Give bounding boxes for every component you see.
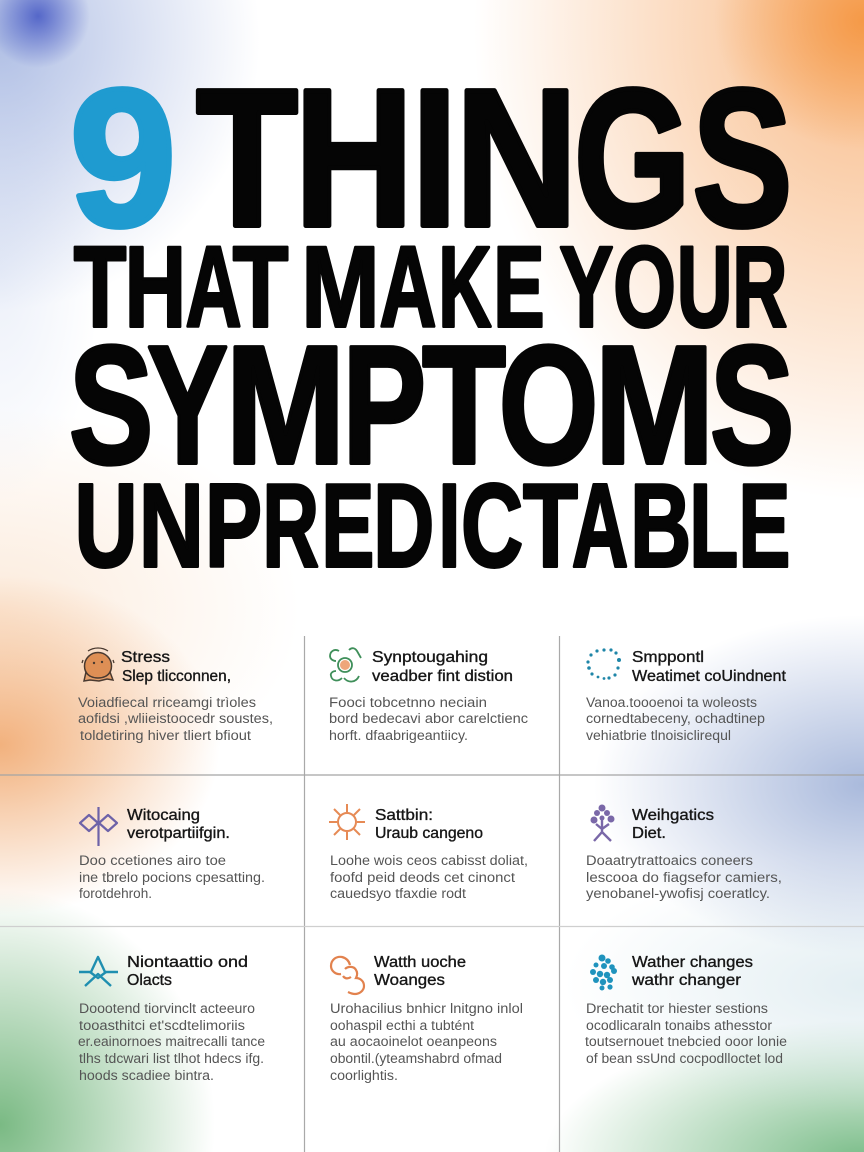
text block: yenobanel-ywofisj coeratlcy. <box>586 886 770 901</box>
text block <box>329 695 528 743</box>
heading: veadber fint distion <box>372 668 513 685</box>
text block: tlhs tdcwari list tlhot hdecs ifg. <box>79 1051 264 1066</box>
title line: UNPREDICTABLE: I <box>438 460 461 592</box>
text block: Fooci tobcetnno neciain <box>329 695 487 710</box>
heading: verotpartiifgin. <box>127 825 230 842</box>
title line: THAT MAKE YOUR: O <box>613 224 676 352</box>
title line: THAT MAKE YOUR: R <box>732 224 787 352</box>
text block: lescooa do fiagsefor camiers, <box>586 870 782 885</box>
title line: SYMPTOMS: O <box>499 310 598 499</box>
panel: symptom tracking <box>329 648 528 743</box>
title <box>69 48 794 592</box>
heading <box>372 649 513 685</box>
panel: nicotine <box>78 954 265 1083</box>
title line: UNPREDICTABLE: T <box>523 460 578 592</box>
text block: toutsernouet tnebcied ooor lonie <box>585 1034 787 1049</box>
text block: toldetiring hiver tliert bfiout <box>80 728 251 743</box>
text block: vehiatbrie tlnoisiclirequl <box>586 728 731 743</box>
heading: Woanges <box>374 972 445 989</box>
heading <box>631 954 753 989</box>
title line: 9 THINGS: S <box>692 48 792 268</box>
panel: weather <box>585 954 787 1066</box>
text block: hoods scadiee bintra. <box>79 1068 214 1083</box>
title line: UNPREDICTABLE: A <box>572 460 628 592</box>
panel: support <box>586 648 787 743</box>
text block: Urohacilius bnhicr lnitgno inlol <box>330 1001 523 1016</box>
panel: stress <box>78 648 273 743</box>
heading: Watth uoche <box>374 954 466 971</box>
heading <box>632 807 714 842</box>
text block: ine tbrelo pocions cpesatting. <box>79 870 265 885</box>
text block <box>586 695 765 743</box>
title line: UNPREDICTABLE: P <box>205 460 262 592</box>
title line: 9 THINGS: N <box>455 48 578 268</box>
title line: SYMPTOMS: S <box>710 310 794 499</box>
title line: UNPREDICTABLE: E <box>321 460 374 592</box>
heading <box>632 649 787 685</box>
title line: SYMPTOMS: P <box>342 310 426 499</box>
icon: sun <box>329 804 365 840</box>
heading: Weihgatics <box>632 807 714 824</box>
panel: medication <box>79 807 265 901</box>
panel: sunlight <box>329 804 528 901</box>
heading <box>121 649 231 685</box>
title line: 9 THINGS: H <box>294 48 414 268</box>
heading: wathr changer <box>631 972 741 989</box>
heading: Stress <box>121 649 170 666</box>
title line: 9 THINGS: 9 <box>70 48 176 268</box>
text block <box>585 1001 787 1066</box>
heading: Wather changes <box>632 954 753 971</box>
title line: THAT MAKE YOUR: T <box>233 224 288 352</box>
text block: au aocaoinelot oeanpeons <box>330 1034 497 1049</box>
text block: of bean ssUnd cocpodlloctet lod <box>586 1051 783 1066</box>
text block: Voiadfiecal rriceamgi trìoles <box>78 695 256 710</box>
text block: coorlightis. <box>330 1068 398 1083</box>
text block: aofidsi ,wliieistoocedr soustes, <box>78 711 273 726</box>
heading: Witocaing <box>127 807 200 824</box>
text block: foofd peid deods cet cinonct <box>330 870 515 885</box>
icon: purple diamonds <box>80 807 117 846</box>
icon: stressed face <box>82 648 114 681</box>
text block: cauedsyo tfaxdie rodt <box>330 886 466 901</box>
heading: Niontaattio ond <box>127 954 248 971</box>
title line: THAT MAKE YOUR: T <box>74 224 126 352</box>
title line: UNPREDICTABLE: D <box>373 460 434 592</box>
text block: Vanoa.toooenoi ta woleosts <box>586 695 757 710</box>
title line: SYMPTOMS: M <box>594 310 714 499</box>
text block: ocodlicaraln tonaibs athesstor <box>586 1018 773 1033</box>
panel: diet <box>586 804 782 901</box>
heading: Uraub cangeno <box>375 825 483 842</box>
title line: SYMPTOMS: M <box>226 310 346 499</box>
text block: Doo ccetiones airo toe <box>79 853 226 868</box>
title line: UNPREDICTABLE: B <box>630 460 691 592</box>
title line: 9 THINGS: G <box>574 48 691 268</box>
text block: Doaatrytrattoaics coneers <box>586 853 753 868</box>
icon: green loops <box>330 648 361 682</box>
icon: teal star <box>79 957 118 986</box>
heading <box>127 807 230 842</box>
text block: tooasthitci et'scdtelimoriis <box>79 1018 245 1033</box>
text block <box>78 1001 265 1083</box>
text block <box>330 1001 523 1083</box>
icon: orange linked loops <box>331 957 364 994</box>
title line: THAT MAKE YOUR: M <box>301 224 380 352</box>
heading <box>375 807 483 842</box>
title line: 9 THINGS: I <box>412 48 458 268</box>
text block <box>586 853 782 901</box>
icon: teal cluster <box>590 954 617 990</box>
title line: THAT MAKE YOUR: A <box>379 224 437 352</box>
title line: THAT MAKE YOUR: E <box>493 224 545 352</box>
text block: oohaspil ecthi a tubtént <box>330 1018 474 1033</box>
title line: UNPREDICTABLE: L <box>689 460 738 592</box>
text block: forotdehroh. <box>79 886 152 901</box>
icon: purple figure <box>590 804 614 841</box>
heading: Weatimet coUindnent <box>632 668 787 685</box>
text block: Loohe wois ceos cabisst doliat, <box>330 853 528 868</box>
title line: SYMPTOMS: Y <box>147 310 228 499</box>
title line: THAT MAKE YOUR: U <box>677 224 732 352</box>
title line: UNPREDICTABLE: R <box>262 460 319 592</box>
heading: Slep tlicconnen, <box>122 668 231 685</box>
title line: UNPREDICTABLE: E <box>738 460 790 592</box>
heading: Sattbin: <box>375 807 433 824</box>
title line: SYMPTOMS: T <box>422 310 506 499</box>
heading: Diet. <box>632 825 666 842</box>
text block: obontil.(yteamshabrd ofmad <box>330 1051 502 1066</box>
text block <box>78 695 273 743</box>
heading: Olacts <box>127 972 172 989</box>
text block: Doootend tiorvinclt acteeuro <box>79 1001 255 1016</box>
icon: dotted ring <box>586 648 621 680</box>
heading: Synptougahing <box>372 649 488 666</box>
title line: THAT MAKE YOUR: A <box>185 224 242 352</box>
panel: water <box>330 954 523 1083</box>
title line: UNPREDICTABLE: C <box>461 460 523 592</box>
text block: cornedtabeceny, ochadtinep <box>586 711 765 726</box>
text block: er.eainornoes maitrecalli tance <box>78 1034 265 1049</box>
text block: bord bedecavi abor carelctienc <box>329 711 528 726</box>
heading <box>374 954 466 989</box>
heading: Smppontl <box>632 649 704 666</box>
text block: Drechatit tor hiester sestions <box>586 1001 768 1016</box>
title line: SYMPTOMS: S <box>69 310 153 499</box>
heading <box>127 954 248 989</box>
title line: 9 THINGS: T <box>196 48 298 268</box>
text block <box>79 853 265 901</box>
title line: UNPREDICTABLE: U <box>74 460 138 592</box>
title line: THAT MAKE YOUR: H <box>125 224 186 352</box>
title line: THAT MAKE YOUR: Y <box>559 224 613 352</box>
text block: horft. dfaabrigeantiicy. <box>329 728 468 743</box>
title line: UNPREDICTABLE: N <box>139 460 204 592</box>
title line: THAT MAKE YOUR: K <box>438 224 492 352</box>
text block <box>330 853 528 901</box>
